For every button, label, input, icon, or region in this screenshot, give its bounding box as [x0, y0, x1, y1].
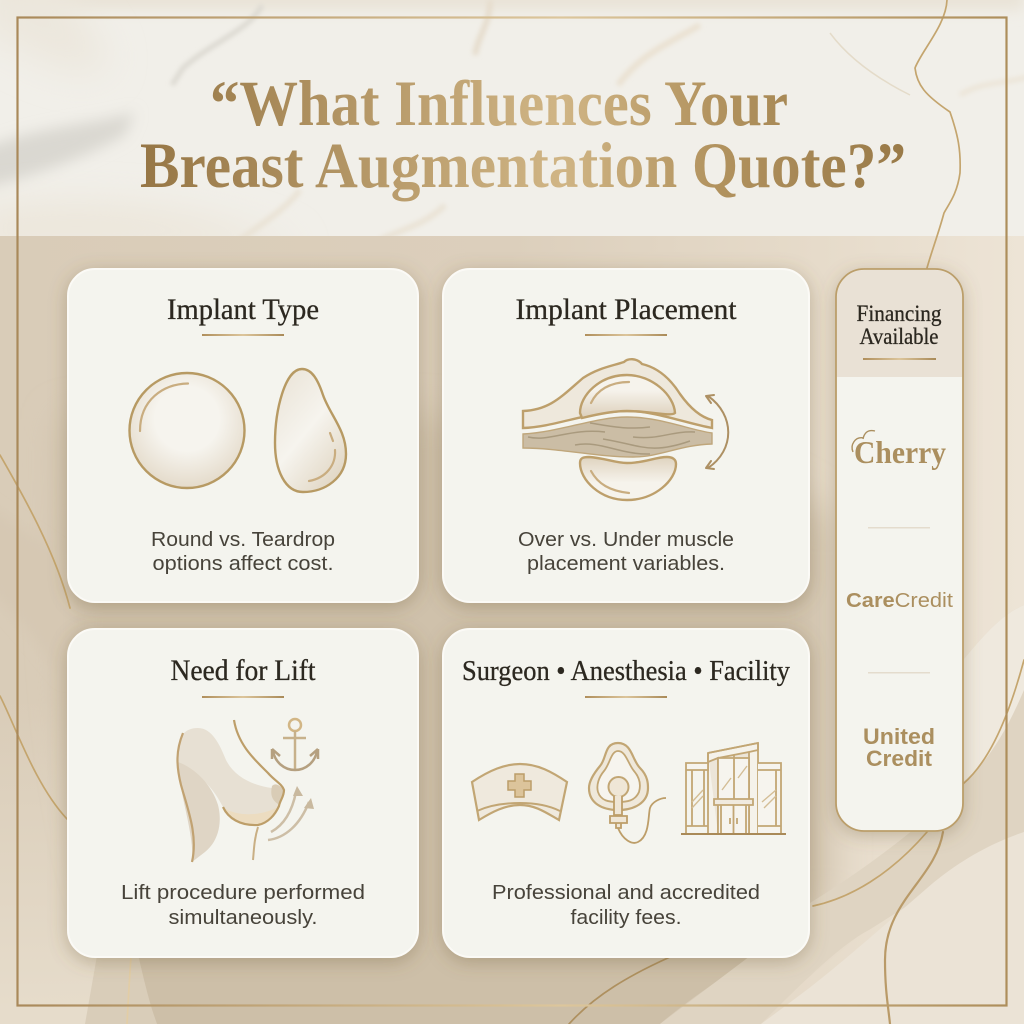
text: surgeon anesthesia facility: Professional and accredited [492, 882, 760, 904]
title: “What Influences Your [210, 68, 788, 140]
marble header background [0, 0, 1024, 250]
text: surgeon anesthesia facility [492, 882, 760, 929]
text: need for lift: Lift procedure performed [121, 882, 365, 904]
icon: breast lift with anchor [177, 719, 318, 862]
heading: financing available [856, 301, 942, 349]
panel: implant type [68, 269, 418, 602]
text: need for lift [121, 882, 365, 929]
heading: surgeon anesthesia facility: Surgeon • Anesthesia • Facility [462, 655, 790, 687]
icon: implant placement cross-section [523, 359, 728, 500]
logo: United Credit: United [863, 724, 935, 749]
heading: need for lift: Need for Lift [170, 654, 316, 687]
logo: United Credit [863, 724, 935, 771]
text: implant placement [518, 529, 734, 575]
panel: need for lift [68, 629, 418, 957]
title: Breast Augmentation Quote?” [140, 130, 906, 202]
text: implant type: options affect cost. [152, 553, 334, 575]
text: implant type [151, 529, 335, 575]
icon: anesthesia mask [589, 743, 666, 843]
icon: surgical cap [472, 764, 567, 820]
text: implant placement: placement variables. [527, 553, 725, 575]
icon: round and teardrop implants [130, 369, 346, 492]
logo: United Credit: Credit [866, 746, 933, 771]
logo: CareCredit: CareCredit [846, 590, 953, 612]
heading: financing available: Available [860, 324, 938, 349]
heading: financing available: Financing [856, 301, 942, 326]
title [140, 68, 906, 202]
text: surgeon anesthesia facility: facility fees. [570, 907, 682, 929]
heading: implant type: Implant Type [167, 293, 319, 326]
text: need for lift: simultaneously. [168, 907, 318, 929]
text: implant placement: Over vs. Under muscle [518, 529, 734, 551]
panel: implant placement [443, 269, 809, 602]
logo: Cherry: Cherry [854, 434, 946, 470]
icon: medical facility building [681, 743, 786, 834]
text: implant type: Round vs. Teardrop [151, 529, 335, 551]
panel: financing sidebar [836, 269, 963, 831]
panel: surgeon anesthesia facility [443, 629, 809, 957]
lower beige background [0, 236, 1024, 1024]
heading: implant placement: Implant Placement [516, 293, 737, 326]
